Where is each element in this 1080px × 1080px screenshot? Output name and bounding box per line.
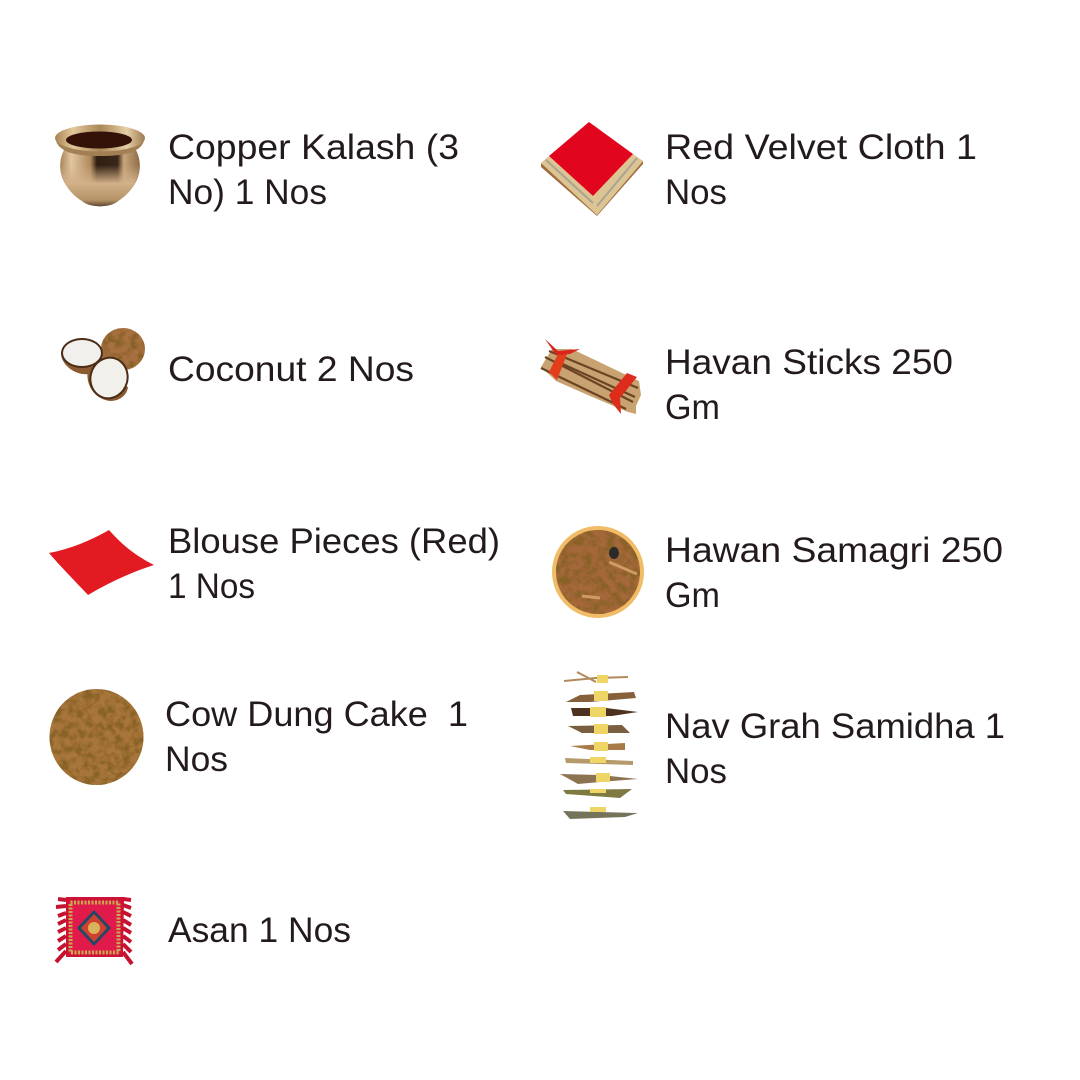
item: red velvet cloth <box>541 122 977 216</box>
label: cow dung cake: Cow Dung Cake 1 <box>165 695 468 734</box>
icon: copper kalash <box>55 124 145 206</box>
item: hawan samagri <box>552 526 1003 618</box>
item: nav grah samidha <box>560 672 1005 819</box>
icon: hawan samagri bowl <box>552 526 644 618</box>
label: copper kalash: No) 1 Nos <box>168 173 327 212</box>
label: red velvet cloth: Red Velvet Cloth 1 <box>665 128 977 167</box>
label: blouse pieces: 1 Nos <box>168 567 255 606</box>
item: blouse pieces <box>49 522 500 606</box>
icon: nav grah samidha bundles <box>560 672 638 819</box>
item: copper kalash <box>55 124 459 212</box>
label: copper kalash: Copper Kalash (3 <box>168 128 459 167</box>
icon: coconut <box>61 328 145 404</box>
item: cow dung cake <box>50 689 468 785</box>
label: asan: Asan 1 Nos <box>168 911 351 950</box>
label: coconut: Coconut 2 Nos <box>168 350 414 389</box>
label: hawan samagri: Gm <box>665 576 720 615</box>
icon: red velvet cloth <box>541 122 643 216</box>
icon: red asan mat <box>56 897 132 964</box>
icon: cow dung cake <box>50 689 144 785</box>
label: havan sticks: Gm <box>665 388 720 427</box>
label: blouse pieces: Blouse Pieces (Red) <box>168 522 500 561</box>
item: asan <box>56 897 351 964</box>
label: nav grah samidha: Nos <box>665 752 727 791</box>
label: nav grah samidha: Nav Grah Samidha 1 <box>665 707 1005 746</box>
item: havan sticks <box>541 339 953 427</box>
label: cow dung cake: Nos <box>165 740 228 779</box>
item: coconut <box>61 328 414 404</box>
label: havan sticks: Havan Sticks 250 <box>665 343 953 382</box>
icon: havan sticks bundle <box>541 339 641 414</box>
label: hawan samagri: Hawan Samagri 250 <box>665 531 1003 570</box>
icon: red blouse piece <box>49 530 154 595</box>
label: red velvet cloth: Nos <box>665 173 727 212</box>
